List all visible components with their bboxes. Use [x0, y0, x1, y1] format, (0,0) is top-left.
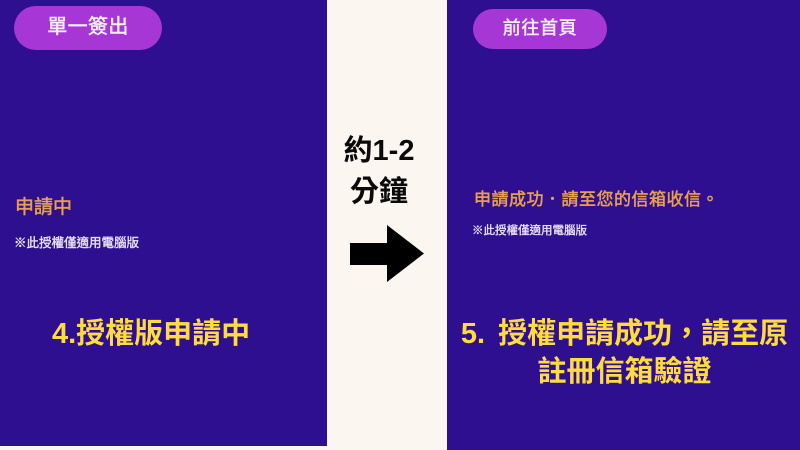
caption: step 5: 5. 授權申請成功，請至原 [461, 318, 788, 350]
arrow: to next step [350, 225, 424, 282]
button: go to home page: 前往首頁 [503, 18, 577, 38]
note: desktop only: ※此授權僅適用電腦版 [14, 236, 139, 250]
button: single sign-out [14, 6, 162, 50]
button: single sign-out: 單一簽出 [47, 16, 129, 38]
panel: step 4 screenshot [0, 0, 327, 446]
caption: step 4: 4.授權版申請中 [52, 318, 250, 350]
label: about 1-2 minutes: 約1-2 [344, 135, 414, 167]
caption: step 5: 註冊信箱驗證 [537, 356, 712, 388]
button: go to home page [473, 9, 607, 49]
panel: step 5 screenshot [447, 0, 800, 450]
label: about 1-2 minutes [344, 135, 414, 208]
status text: applying: 申請中 [15, 197, 72, 218]
label: about 1-2 minutes: 分鐘 [350, 176, 408, 208]
note: desktop only: ※此授權僅適用電腦版 [472, 225, 587, 237]
status text: application succeeded: 申請成功．請至您的信箱收信。 [474, 190, 719, 209]
caption: step 5 [461, 318, 788, 388]
